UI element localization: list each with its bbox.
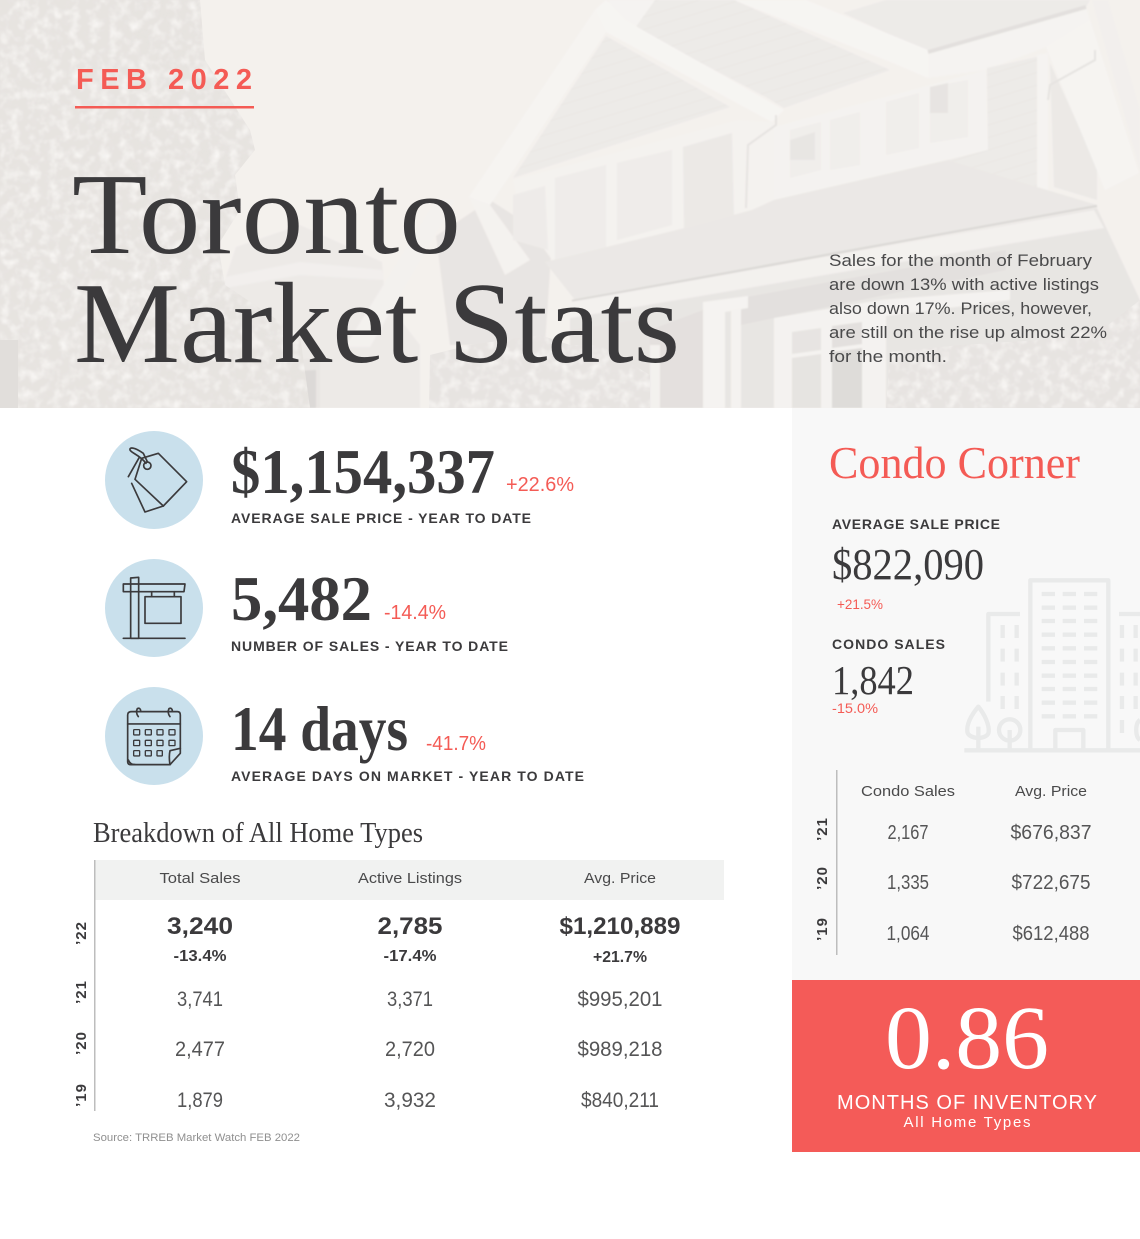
panel: months of inventory: All Home Types xyxy=(904,1114,1030,1131)
panel: months of inventory: 0.86 xyxy=(885,989,1049,1088)
rows 2021 to 2019: 3,371 xyxy=(387,988,433,1011)
condo sales xyxy=(832,636,945,716)
condo table rows: $676,837 xyxy=(1010,822,1092,844)
stat: number of sales: NUMBER OF SALES - YEAR TO DATE xyxy=(231,638,508,654)
condo year labels xyxy=(814,817,831,941)
condo table rows: 1,064 xyxy=(886,923,930,945)
table header row xyxy=(160,870,656,887)
source note: Source: TRREB Market Watch FEB 2022 xyxy=(93,1132,300,1144)
stat: average sale price xyxy=(105,431,574,529)
stat: number of sales: -14.4% xyxy=(384,602,446,624)
rows 2021 to 2019: 2,720 xyxy=(385,1038,435,1061)
stat: average sale price: $1,154,337 xyxy=(231,436,495,507)
row 2022: +21.7% xyxy=(593,949,647,966)
title: Market Stats xyxy=(74,260,680,388)
row 2022 xyxy=(167,913,680,966)
row 2022: 3,240 xyxy=(167,913,233,940)
condo table header xyxy=(861,783,1087,800)
rows 2021 to 2019: $995,201 xyxy=(578,988,662,1011)
condo table header: Condo Sales xyxy=(861,783,955,800)
table header row: Avg. Price xyxy=(584,870,656,887)
rows 2021 to 2019: $840,211 xyxy=(581,1089,659,1112)
panel: condo background xyxy=(792,408,1140,980)
row 2022: $1,210,889 xyxy=(560,913,680,940)
icon: for sale sign xyxy=(105,559,203,657)
trees and bushes xyxy=(0,0,310,408)
condo table rows: 2,167 xyxy=(888,822,928,844)
rows 2021 to 2019: 3,741 xyxy=(177,988,223,1011)
condo sales: -15.0% xyxy=(832,700,878,716)
intro paragraph: Sales for the month of February xyxy=(829,251,1093,270)
table: condo history xyxy=(814,770,1092,955)
panel: months of inventory xyxy=(792,980,1140,1152)
intro paragraph: also down 17%. Prices, however, xyxy=(829,299,1092,318)
main lower roof xyxy=(545,160,1097,300)
intro paragraph: for the month. xyxy=(829,347,947,366)
panel: months of inventory: MONTHS OF INVENTORY xyxy=(837,1092,1097,1114)
row 2022: -17.4% xyxy=(384,948,436,965)
condo average sale price: AVERAGE SALE PRICE xyxy=(832,516,1000,532)
rows 2021 to 2019: 2,477 xyxy=(175,1038,225,1061)
stat: days on market: 14 days xyxy=(231,693,408,764)
condo sales: 1,842 xyxy=(832,657,914,703)
porch wall xyxy=(570,208,1140,408)
intro paragraph xyxy=(829,251,1107,366)
table header row: Active Listings xyxy=(358,870,462,887)
stat: average sale price: +22.6% xyxy=(506,474,574,496)
main roof side xyxy=(436,200,552,345)
date heading: FEB 2022 xyxy=(76,64,252,96)
condo table rows: $722,675 xyxy=(1012,872,1090,894)
rows 2021 to 2019: $989,218 xyxy=(578,1038,662,1061)
neighbouring house xyxy=(190,225,420,408)
row 2022: 2,785 xyxy=(378,913,442,940)
intro paragraph: are down 13% with active listings xyxy=(829,275,1099,294)
condo average sale price: $822,090 xyxy=(832,540,984,589)
condo year labels: ’21 xyxy=(814,817,831,841)
condo table header: Avg. Price xyxy=(1015,783,1087,800)
stat: days on market: AVERAGE DAYS ON MARKET - YEAR TO DATE xyxy=(231,768,584,784)
condo table rows xyxy=(886,822,1092,945)
table: all home types xyxy=(73,860,724,1112)
row 2022: -13.4% xyxy=(174,948,226,965)
rows 2021 to 2019: 1,879 xyxy=(177,1089,223,1112)
rows 2021 to 2019 xyxy=(175,988,662,1112)
table header row: Total Sales xyxy=(160,870,240,887)
year labels xyxy=(73,921,90,1107)
rows 2021 to 2019: 3,932 xyxy=(384,1089,436,1112)
stat: days on market: -41.7% xyxy=(426,733,486,755)
condo table rows: $612,488 xyxy=(1012,923,1090,945)
condo year labels: ’20 xyxy=(814,866,831,890)
title: Toronto xyxy=(72,151,461,279)
icon: condo buildings xyxy=(964,580,1140,750)
condo sales: CONDO SALES xyxy=(832,636,945,652)
title xyxy=(72,151,680,388)
condo year labels: ’19 xyxy=(814,917,831,941)
year labels: ’22 xyxy=(73,921,90,945)
stat: number of sales: 5,482 xyxy=(231,563,372,634)
header background photo xyxy=(0,0,1140,408)
year labels: ’19 xyxy=(73,1083,90,1107)
breakdown heading: Breakdown of All Home Types xyxy=(93,818,423,849)
stat: number of sales xyxy=(105,559,508,657)
condo table rows: 1,335 xyxy=(887,872,929,894)
stat: days on market xyxy=(105,687,584,785)
icon: calendar xyxy=(105,687,203,785)
icon: price tags xyxy=(105,431,203,529)
condo average sale price xyxy=(832,516,1000,612)
intro paragraph: are still on the rise up almost 22% xyxy=(829,323,1107,342)
condo average sale price: +21.5% xyxy=(837,596,883,612)
stat: average sale price: AVERAGE SALE PRICE - YEAR TO DATE xyxy=(231,510,531,526)
condo heading: Condo Corner xyxy=(829,438,1080,488)
year labels: ’20 xyxy=(73,1031,90,1055)
year labels: ’21 xyxy=(73,980,90,1004)
